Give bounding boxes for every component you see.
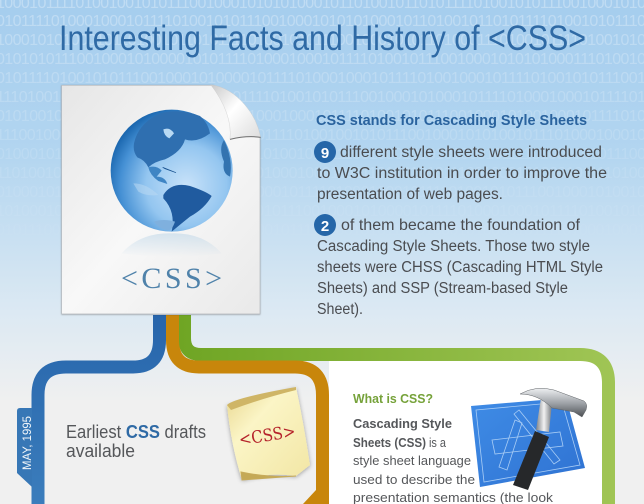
file icon with globe	[62, 85, 261, 314]
green pipe and panel	[184, 315, 608, 504]
what is CSS text: Sheets (CSS)	[353, 435, 426, 450]
paragraph two: Sheet).	[317, 301, 363, 318]
text: 01010010111001000101000010111101000100010111101001010111001000101001000101111010	[0, 108, 644, 125]
what is CSS text: style sheet language	[353, 453, 471, 468]
badge: 2	[314, 214, 336, 236]
orange pipe	[172, 315, 322, 504]
text: 11100100010100101110010001010001011110100100101011100100010101001011101000100010	[0, 127, 644, 144]
badge: 9	[314, 141, 336, 163]
text: 11010010101110010001010000101111010001000101111010010101110010001010001011110100	[0, 165, 644, 182]
icon: blueprint and hammer	[471, 388, 587, 490]
paragraph one: presentation of web pages.	[317, 186, 503, 203]
page curl	[211, 85, 261, 139]
text: 01011100100010100001011110100010001011110100101011100100010100001011110100010001	[0, 222, 644, 239]
file page	[62, 85, 260, 314]
text: 10100010111101000100010111101001010111001000101000010111101000100010111101001010	[0, 203, 644, 220]
icon: parchment	[227, 387, 310, 480]
blueprint	[471, 398, 585, 487]
intro text block	[314, 113, 607, 318]
paragraph one: to W3C institution in order to improve the	[317, 165, 607, 182]
milestone text: Earliest CSS drafts	[66, 422, 206, 442]
text: 01010101110010001010000101011110100010001011110100101110010001010101000111010010	[0, 51, 644, 68]
text: 10001010100010110100101101011110100101011100100010101101000111010010111101001010	[0, 32, 644, 49]
what is CSS text	[353, 392, 554, 504]
paragraph two	[317, 217, 603, 318]
connector pipes	[38, 315, 608, 504]
hammer	[513, 388, 587, 490]
badge: 2: 2	[321, 218, 329, 235]
date tab: MAY, 1995	[22, 416, 34, 470]
milestone text: available	[66, 441, 135, 461]
orange pipe tab	[303, 490, 316, 504]
text: 01000101000010111101000100010111101001010111001000101010100010111101000101011100	[0, 146, 644, 163]
blue pipe	[38, 315, 160, 504]
intro heading: CSS stands for Cascading Style Sheets	[316, 113, 587, 129]
milestone text	[66, 422, 206, 461]
paragraph two: Cascading Style Sheets. Those two style	[317, 238, 590, 255]
paragraph one: different style sheets were introduced	[340, 144, 602, 161]
what is CSS text: used to describe the	[353, 472, 475, 487]
text: 11101001010001011110100010001011110100101011100100010100010111101000100010111101	[0, 89, 644, 106]
paragraph two: Sheets) and SSP (Stream-based Style	[317, 280, 568, 297]
what is CSS text: is a	[429, 435, 447, 450]
text: 01011110100101011100100010100001011110100010001011110100100010111101001010111001	[0, 70, 644, 87]
globe reflection	[122, 233, 222, 257]
date tab	[17, 408, 34, 487]
paragraph two: of them became the foundation of	[341, 217, 581, 234]
globe	[111, 110, 233, 232]
icon: parchment: <CSS>	[238, 422, 297, 450]
text: 01011110100010001011110100101011100100010101010001011010010110101111010010101110	[0, 13, 644, 30]
what is CSS text: Cascading Style	[353, 416, 452, 431]
paragraph two: sheets were CHSS (Cascading HTML Style	[317, 259, 603, 276]
paragraph one	[317, 144, 607, 203]
what is CSS heading: What is CSS?	[353, 392, 433, 406]
text: 01000101111010010101110010001010000101111010001000101111010010101110010001010010	[0, 184, 644, 201]
badge: 9: 9	[321, 145, 329, 162]
file label: <CSS>	[121, 262, 222, 295]
